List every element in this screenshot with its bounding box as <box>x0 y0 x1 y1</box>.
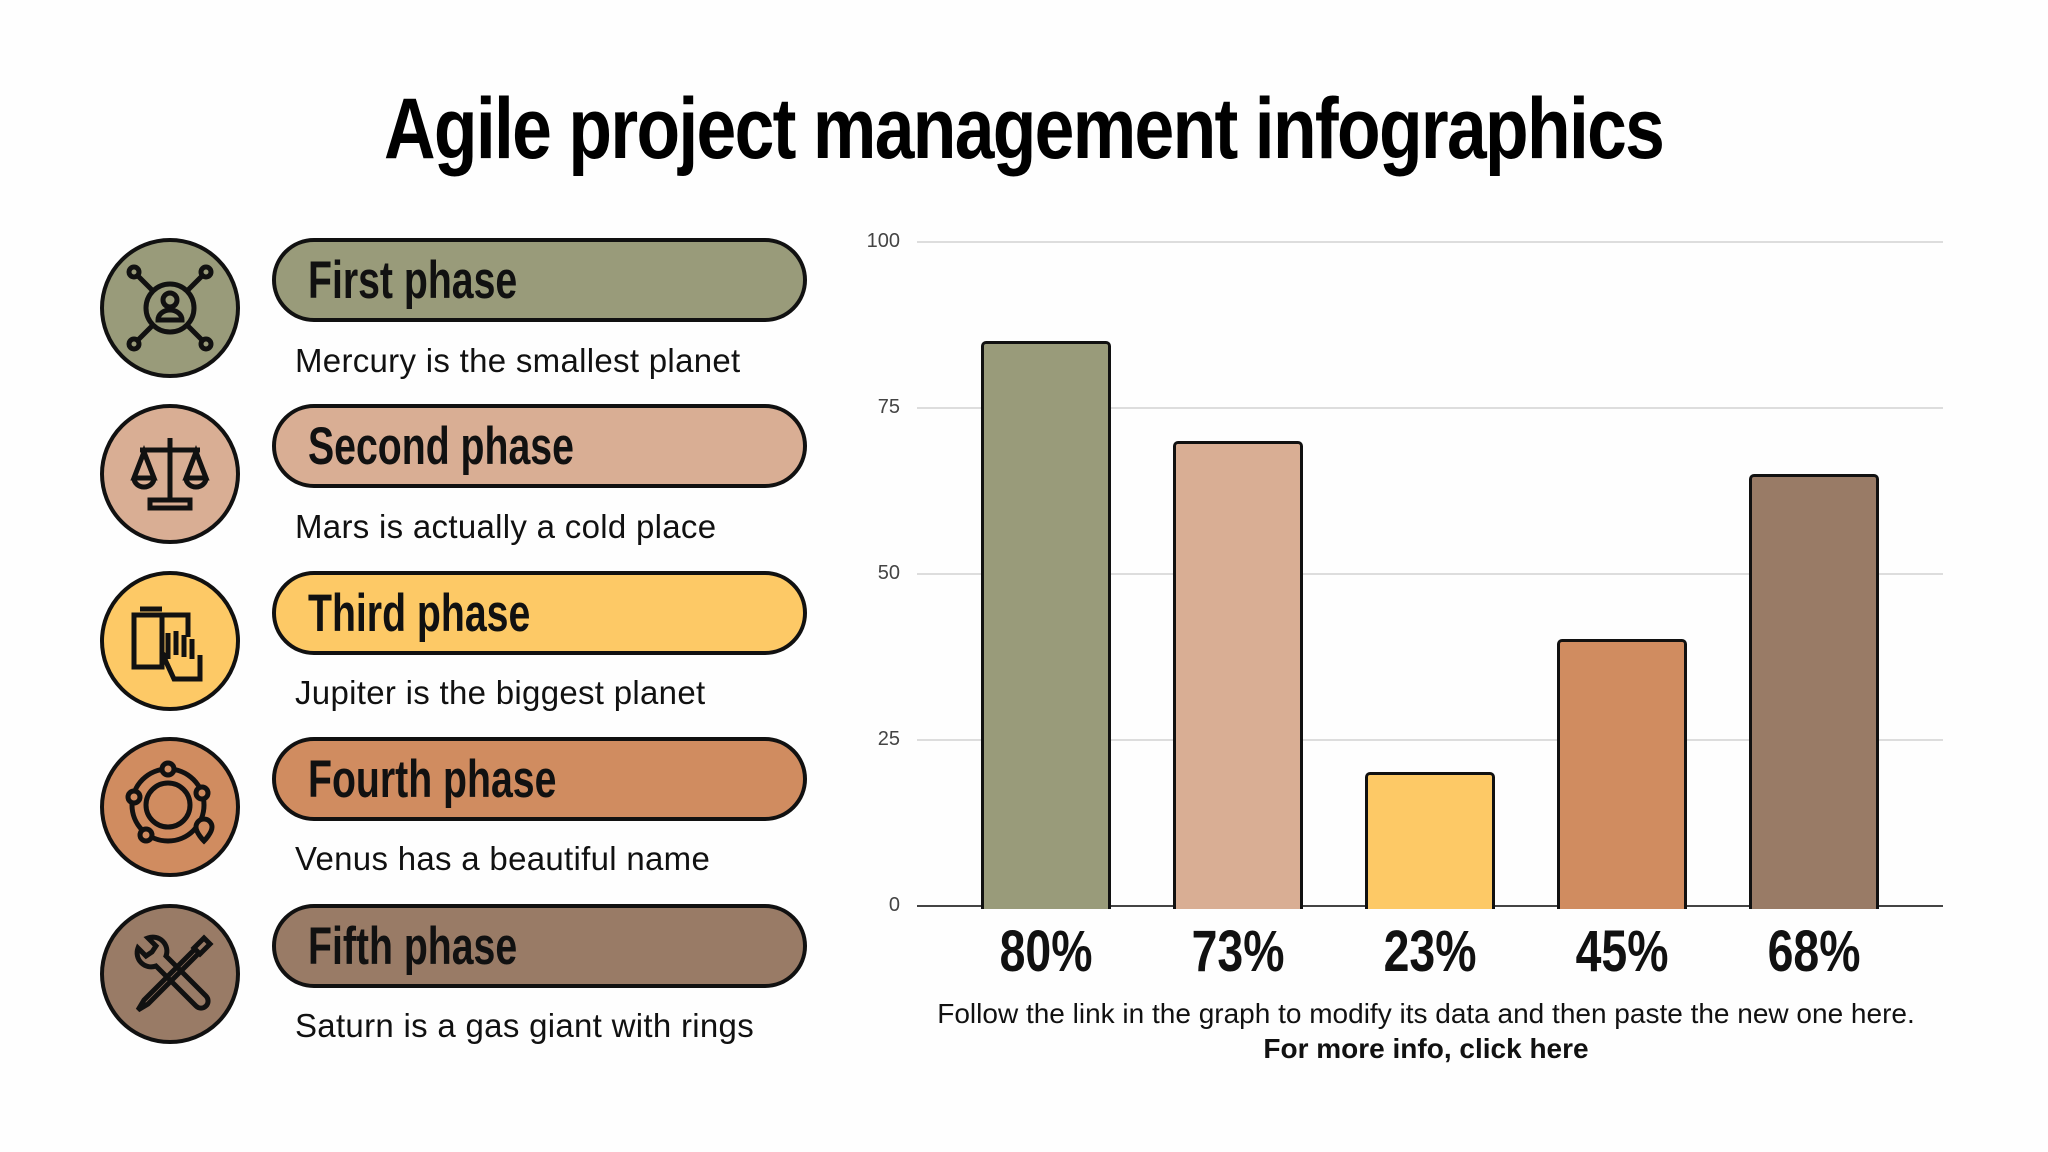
value labels: 23% <box>1384 919 1476 984</box>
value labels: 45% <box>1576 919 1668 984</box>
icon: tools <box>100 904 240 1044</box>
value labels: 73% <box>1192 919 1284 984</box>
icon: book hand <box>100 571 240 711</box>
pill: third phase <box>272 571 807 655</box>
gridlines & axis labels: 75 <box>878 396 900 418</box>
value labels: 68% <box>1768 919 1860 984</box>
footer note <box>937 998 1915 1064</box>
gridlines & axis labels: 50 <box>878 562 900 584</box>
pill: fourth phase: Fourth phase <box>308 750 556 809</box>
pill: first phase: First phase <box>308 251 517 310</box>
bar 1 <box>981 341 1111 909</box>
gridlines & axis labels: 100 <box>867 230 900 252</box>
icon: network person <box>100 238 240 378</box>
desc 3: Jupiter is the biggest planet <box>295 674 705 711</box>
gridlines & axis labels: 25 <box>878 728 900 750</box>
title: Agile project management infographics <box>384 81 1664 177</box>
icon: scales <box>100 404 240 544</box>
gridlines & axis labels: 0 <box>889 894 900 916</box>
footer note: Follow the link in the graph to modify its data and then paste the new one here. <box>937 998 1915 1029</box>
pill: fifth phase: Fifth phase <box>308 917 517 976</box>
desc 4: Venus has a beautiful name <box>295 840 710 877</box>
desc 1: Mercury is the smallest planet <box>295 342 740 379</box>
bar 5 <box>1749 474 1879 909</box>
bar chart <box>867 230 1943 984</box>
pill: third phase: Third phase <box>308 584 530 643</box>
footer note: For more info, click here <box>1263 1033 1589 1064</box>
bar 4 <box>1557 639 1687 909</box>
pill: second phase <box>272 404 807 488</box>
icon: globe network <box>100 737 240 877</box>
pill: first phase <box>272 238 807 322</box>
desc 5: Saturn is a gas giant with rings <box>295 1007 754 1044</box>
gridlines & axis labels <box>867 230 1943 916</box>
bar 3 <box>1365 772 1495 909</box>
value labels: 80% <box>1000 919 1092 984</box>
bar 2 <box>1173 441 1303 909</box>
desc 2: Mars is actually a cold place <box>295 508 716 545</box>
pill: fifth phase <box>272 904 807 988</box>
pill: second phase: Second phase <box>308 417 574 476</box>
pill: fourth phase <box>272 737 807 821</box>
value labels <box>1000 919 1860 984</box>
